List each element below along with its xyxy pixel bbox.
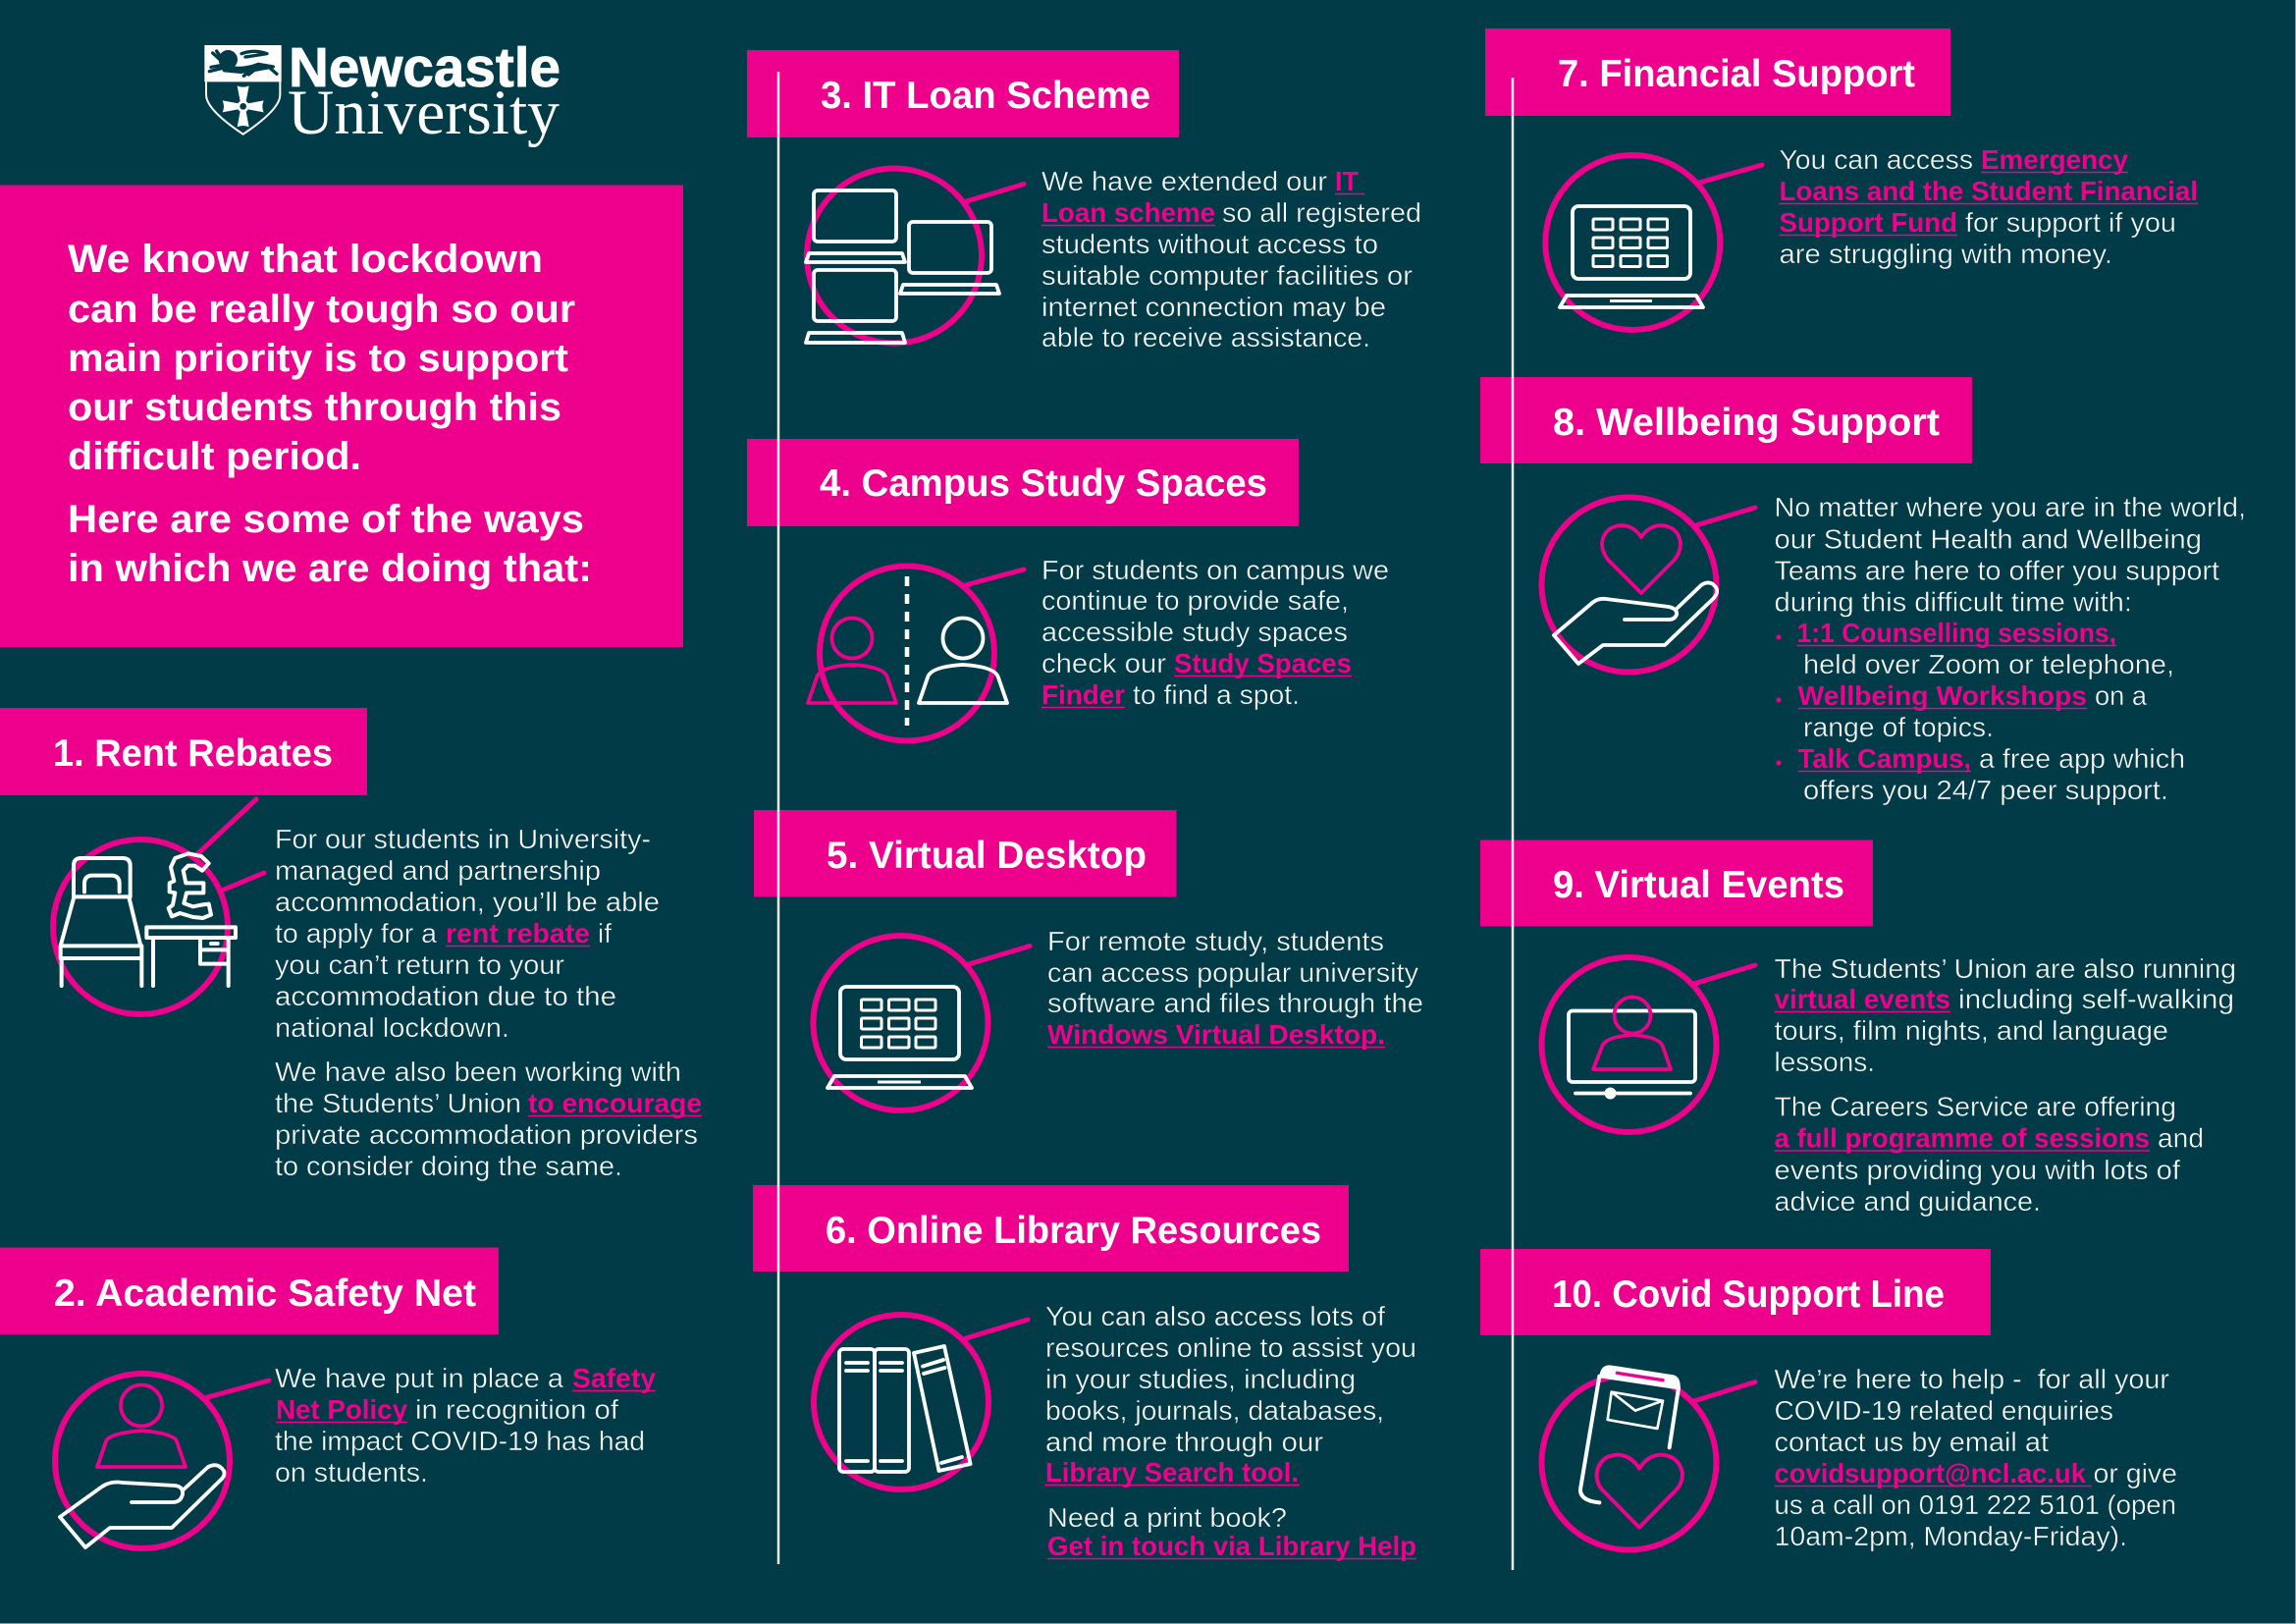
heading: 7. Financial Support: 7. Financial Support [1558, 53, 1915, 95]
heading: 3. IT Loan Scheme [747, 50, 1179, 137]
text block: IT loan: IT [1335, 166, 1359, 196]
panel: 3. IT Loan Scheme [747, 50, 1421, 352]
text block: wellbeing: held over Zoom or telephone, [1803, 649, 2174, 679]
wordmark: Newcastle: Newcastle [289, 36, 561, 99]
text block: virtual events [1775, 953, 2236, 1217]
wordmark: University: University [288, 78, 560, 148]
text block: wellbeing: on a [2095, 680, 2147, 711]
text block: rent rebates: private accommodation providers [275, 1119, 698, 1150]
text block: wellbeing: 1:1 Counselling sessions, [1796, 618, 2116, 648]
text block: IT loan: We have extended our [1041, 166, 1327, 196]
icon: laptop with app grid [1545, 155, 1762, 330]
intro text: our students through this [68, 386, 561, 429]
text block: rent rebates: national lockdown. [275, 1012, 509, 1043]
intro text: in which we are doing that: [68, 547, 592, 590]
heading: 4. Campus Study Spaces: 4. Campus Study Spaces [820, 462, 1267, 505]
text block: virtual events: lessons. [1775, 1047, 1875, 1077]
text block: safety net: Safety [572, 1363, 656, 1393]
heading: 7. Financial Support [1485, 28, 1950, 116]
text block: virtual desktop: For remote study, students [1047, 926, 1384, 956]
icon: phone with envelope and heart [1541, 1365, 1755, 1549]
icon: two distanced people [808, 566, 1024, 740]
text block: financial support: are struggling with money. [1779, 239, 2112, 269]
text block: covid support: or give [2093, 1458, 2177, 1489]
text block: rent rebates: For our students in University- [275, 824, 651, 854]
text block: study spaces: continue to provide safe, [1041, 585, 1349, 616]
text block: IT loan: so all registered [1222, 197, 1421, 228]
text block: study spaces [1041, 555, 1389, 710]
heading: 4. Campus Study Spaces [747, 439, 1299, 526]
intro text: Here are some of the ways [68, 498, 584, 541]
text block: virtual events: including self-walking [1958, 984, 2234, 1014]
text block: wellbeing: a free app which [1979, 743, 2185, 774]
heading: 6. Online Library Resources: 6. Online Library Resources [826, 1210, 1321, 1252]
text block: study spaces: check our [1041, 648, 1166, 678]
text block: IT loan: students without access to [1041, 229, 1378, 259]
heading: 6. Online Library Resources [753, 1185, 1349, 1272]
icon: person in a hand [55, 1374, 269, 1548]
heading: 8. Wellbeing Support [1480, 377, 1972, 463]
text block: covid support: contact us by email at [1775, 1427, 2049, 1457]
text block: virtual events: tours, film nights, and language [1775, 1015, 2168, 1046]
text block: virtual events: The Students’ Union are also running [1775, 953, 2236, 984]
icon: bed, desk and pound sign [53, 799, 264, 1014]
text block: safety net: in recognition of [415, 1394, 618, 1425]
text block: rent rebates: if [598, 918, 612, 948]
text block: virtual desktop [1047, 926, 1423, 1050]
text block: rent rebates: accommodation due to the [275, 981, 616, 1011]
icon: books [814, 1315, 1028, 1489]
heading: 1. Rent Rebates: 1. Rent Rebates [53, 732, 333, 775]
panel: 10. Covid Support Line [1480, 1249, 2177, 1551]
text block: rent rebates: to apply for a [275, 918, 437, 948]
text block: financial support: You can access [1779, 144, 1973, 175]
text block: IT loan: internet connection may be [1041, 292, 1386, 322]
intro text [68, 238, 592, 590]
text block: library: books, journals, databases, [1045, 1395, 1384, 1426]
text block: covid support: us a call on 0191 222 5101 (open [1775, 1489, 2176, 1520]
icon: laptop with app grid [813, 936, 1030, 1110]
panel: 2. Academic Safety Net [0, 1247, 656, 1548]
intro text: can be really tough so our [68, 288, 575, 331]
text block: financial support: Loans and the Student Financial [1779, 176, 2198, 206]
text block: wellbeing: No matter where you are in the world, [1775, 492, 2246, 522]
text block: virtual events: advice and guidance. [1775, 1186, 2041, 1217]
text block: rent rebates: to consider doing the same. [275, 1151, 622, 1181]
intro text: difficult period. [68, 435, 361, 478]
text block: financial support [1779, 144, 2198, 269]
text block: library: Get in touch via Library Help [1047, 1531, 1416, 1561]
text block: wellbeing: Talk Campus, [1798, 743, 1971, 774]
panel: 4. Campus Study Spaces [747, 439, 1389, 740]
text block: wellbeing: range of topics. [1803, 712, 1994, 742]
heading: 9. Virtual Events [1480, 840, 1873, 927]
text block: safety net: We have put in place a [275, 1363, 563, 1393]
text block: study spaces: to find a spot. [1133, 679, 1300, 710]
text block: library: and more through our [1045, 1427, 1323, 1457]
text block: covid support: We’re here to help - for all your [1775, 1364, 2169, 1394]
icon: heart in a hand [1541, 497, 1755, 672]
text block: IT loan: Loan scheme [1041, 197, 1215, 228]
heading: 10. Covid Support Line [1480, 1249, 1991, 1335]
panel: 9. Virtual Events [1480, 840, 2236, 1217]
text block: rent rebates [275, 824, 702, 1181]
text block: IT loan [1041, 166, 1421, 352]
intro text: main priority is to support [68, 337, 568, 380]
text block: library: resources online to assist you [1045, 1332, 1416, 1363]
text block: library [1044, 1301, 1416, 1561]
text block: safety net: Net Policy [276, 1394, 407, 1425]
heading: 1. Rent Rebates [0, 708, 367, 795]
text block: safety net: the impact COVID-19 has had [275, 1426, 645, 1456]
text block: rent rebates: accommodation, you’ll be able [275, 887, 660, 917]
text block: covid support: covidsupport@ncl.ac.uk [1775, 1458, 2086, 1489]
text block: study spaces: Finder [1041, 679, 1125, 710]
text block: virtual events: virtual events [1775, 984, 1950, 1014]
heading: 8. Wellbeing Support: 8. Wellbeing Support [1553, 402, 1940, 444]
text block: rent rebates: you can’t return to your [275, 949, 564, 980]
text block: IT loan: suitable computer facilities or [1041, 260, 1413, 291]
icon: person on video screen [1541, 957, 1755, 1132]
heading: 10. Covid Support Line: 10. Covid Support Line [1552, 1273, 1945, 1316]
text block: virtual desktop: Windows Virtual Desktop. [1047, 1019, 1385, 1050]
text block: rent rebates: rent rebate [446, 918, 590, 948]
panel: 8. Wellbeing Support [1480, 377, 2246, 805]
text block: study spaces: For students on campus we [1041, 555, 1389, 585]
text block: study spaces: Study Spaces [1174, 648, 1352, 678]
text block: rent rebates: to encourage [528, 1088, 702, 1118]
text block: covid support: COVID-19 related enquiries [1775, 1395, 2113, 1426]
intro text: We know that lockdown [68, 238, 543, 281]
text block: wellbeing: offers you 24/7 peer support. [1803, 775, 2168, 805]
text block: library: in your studies, including [1045, 1364, 1356, 1394]
heading: 3. IT Loan Scheme: 3. IT Loan Scheme [821, 75, 1150, 117]
text block: library: You can also access lots of [1045, 1301, 1385, 1331]
logo: Newcastle University [204, 36, 561, 148]
heading: 5. Virtual Desktop [754, 810, 1176, 897]
text block: rent rebates: We have also been working with [275, 1056, 681, 1087]
text block: safety net [275, 1363, 656, 1488]
heading: 2. Academic Safety Net: 2. Academic Safety Net [54, 1272, 476, 1315]
icon: three laptops [806, 169, 1024, 344]
text block: library: Library Search tool. [1045, 1457, 1299, 1488]
panel: 6. Online Library Resources [753, 1185, 1416, 1561]
heading: 2. Academic Safety Net [0, 1247, 499, 1334]
text block: wellbeing: during this difficult time with: [1775, 587, 2132, 617]
panel: introduction [0, 185, 683, 647]
text block: virtual desktop: can access popular university [1047, 957, 1418, 988]
icon: university shield [204, 45, 282, 135]
heading: 5. Virtual Desktop: 5. Virtual Desktop [827, 835, 1147, 877]
text block: covid support: 10am-2pm, Monday-Friday). [1775, 1521, 2127, 1551]
text block: study spaces: accessible study spaces [1041, 617, 1348, 647]
text block: covid support [1775, 1364, 2177, 1551]
text block: safety net: on students. [275, 1457, 428, 1488]
text block: rent rebates: the Students’ Union [275, 1088, 521, 1118]
text block: virtual events: The Careers Service are offering [1775, 1092, 2176, 1121]
panel: 5. Virtual Desktop [754, 810, 1423, 1110]
text block: wellbeing [1775, 492, 2246, 805]
text block: wellbeing: our Student Health and Wellbeing [1775, 524, 2202, 554]
text block: rent rebates: managed and partnership [275, 855, 601, 886]
text block: virtual events: and [2158, 1123, 2204, 1153]
text block: financial support: Emergency [1981, 144, 2128, 175]
text block: financial support: for support if you [1965, 207, 2176, 238]
panel: 7. Financial Support [1485, 28, 2198, 330]
heading: 9. Virtual Events: 9. Virtual Events [1553, 864, 1844, 906]
text block: library: Need a print book? [1047, 1502, 1287, 1533]
text block: virtual desktop: software and files through the [1047, 988, 1423, 1018]
text block: virtual events: a full programme of sessions [1775, 1123, 2150, 1153]
text block: wellbeing: Wellbeing Workshops [1798, 680, 2087, 711]
text block: financial support: Support Fund [1779, 207, 1957, 238]
text block: wellbeing: Teams are here to offer you support [1775, 556, 2219, 585]
text block: IT loan: able to receive assistance. [1041, 322, 1370, 352]
panel: 1. Rent Rebates [0, 708, 702, 1181]
text block: virtual events: events providing you with lots of [1775, 1155, 2180, 1185]
